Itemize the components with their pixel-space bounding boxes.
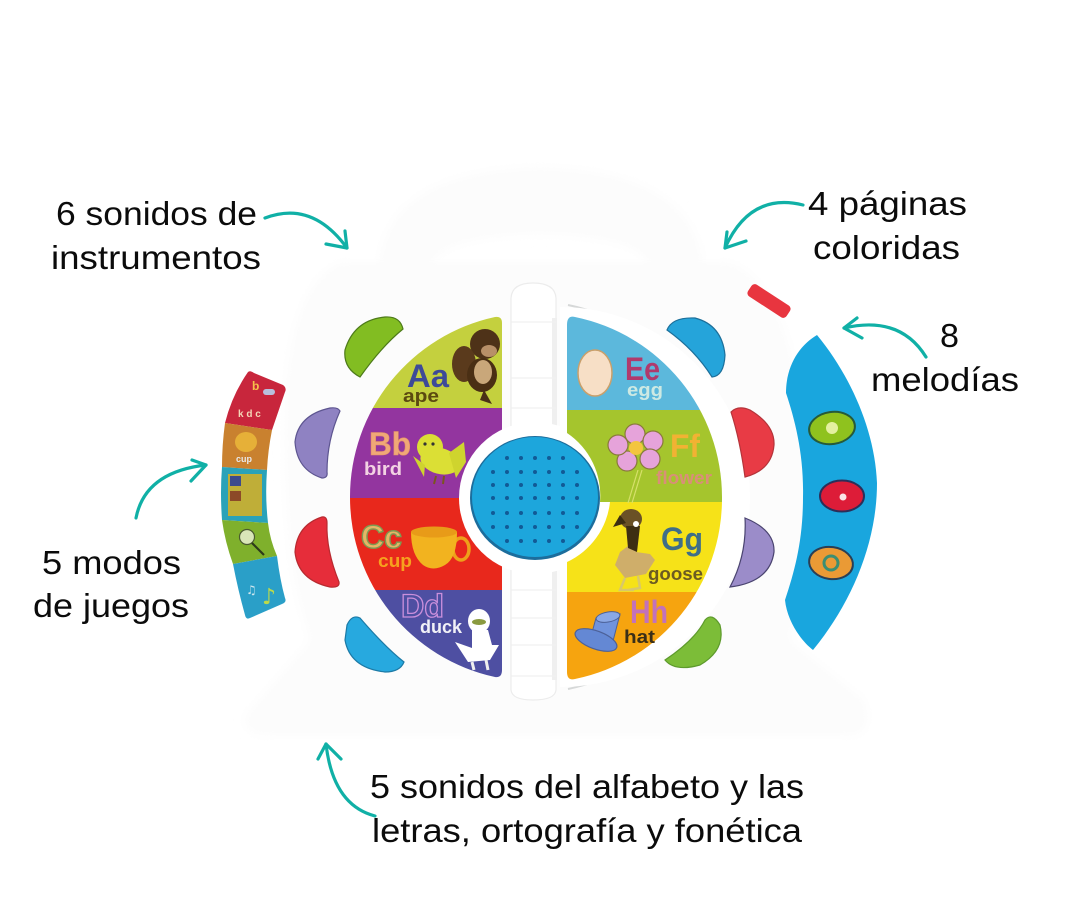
button: blue bottom left: [345, 617, 404, 672]
Dd duck: [401, 588, 499, 670]
label: 8 melodías: melodías: [871, 361, 1019, 398]
icon: goose: [613, 509, 655, 590]
Ff flower: Ff: [670, 428, 700, 464]
arrow: páginas: [725, 203, 803, 248]
Ee egg: [578, 350, 663, 400]
right alphabet page: [567, 316, 722, 680]
label: 8 melodías: [871, 317, 1019, 398]
arrow: alfabeto: [318, 744, 375, 816]
carry handle: [378, 167, 704, 268]
Cc cup: [361, 519, 412, 571]
segment: blue music: ♪: [262, 585, 276, 610]
button: red left: [295, 517, 339, 587]
Cc cup: cup: [378, 551, 412, 571]
button: orange: [807, 544, 855, 582]
segment: blue music: [233, 556, 286, 619]
game mode strip: [221, 371, 286, 619]
centre spine: [511, 283, 557, 700]
label: 8 melodías: 8: [940, 317, 959, 354]
icon: flower: [608, 424, 663, 503]
Hh hat: hat: [624, 627, 655, 647]
button: purple left: [295, 408, 340, 478]
segment: red letters: [225, 371, 286, 430]
Bb bird: Bb: [369, 426, 411, 462]
label: 6 sonidos de instrumentos: 6 sonidos de: [56, 195, 257, 232]
left alphabet page: [33, 185, 1019, 849]
white case: [244, 262, 868, 736]
icon: hat: [572, 610, 621, 656]
Bb bird: bird: [364, 459, 402, 479]
label: 5 modos de juegos: de juegos: [33, 587, 189, 624]
Dd duck: duck: [420, 617, 463, 637]
segment: orange cup: cup: [236, 454, 253, 464]
disc ring: [568, 305, 725, 689]
red top slider: [746, 283, 792, 319]
Aa ape: ape: [403, 386, 439, 406]
Ff flower: flower: [656, 468, 712, 488]
Dd duck: Dd: [401, 588, 444, 624]
Gg goose: Gg: [661, 521, 703, 557]
Gg goose: goose: [648, 564, 703, 584]
label: 5 modos de juegos: [33, 544, 189, 624]
Cc cup: Cc: [361, 519, 402, 555]
icon: ape: [452, 329, 500, 404]
Gg goose: [613, 509, 703, 590]
Aa ape: [403, 329, 500, 406]
blue melody panel: [785, 335, 877, 650]
label: alfabeto y fonética: 5 sonidos del alfabeto y las: [370, 768, 804, 805]
segment: red letters: b: [252, 379, 259, 393]
segment: teal pictures: [221, 467, 268, 523]
Bb bird: [364, 426, 466, 484]
segment: orange cup: [222, 423, 272, 470]
arrow: instrumentos: [265, 213, 347, 248]
Ee egg: Ee: [625, 351, 660, 387]
icon: cup: [411, 526, 469, 568]
instrument buttons: [295, 317, 774, 672]
label: 5 modos de juegos: 5 modos: [42, 544, 181, 581]
icon: egg: [578, 350, 612, 396]
icon: duck: [455, 609, 499, 670]
segment: red letters: k d c: [238, 409, 261, 420]
button: green top left: [345, 317, 403, 377]
label: 6 sonidos de instrumentos: instrumentos: [51, 239, 261, 276]
label: 4 páginas coloridas: [808, 185, 967, 266]
button: red: [820, 480, 864, 512]
Ee egg: egg: [627, 380, 663, 400]
button: red right: [731, 408, 774, 477]
button: green: [807, 409, 857, 447]
toy body: [244, 167, 868, 736]
Ff flower: [608, 424, 712, 503]
label: alfabeto y fonética: letras, ortografía y fonética: [372, 812, 803, 849]
Hh hat: [572, 594, 668, 656]
speaker: [459, 422, 611, 574]
icon: bird: [413, 434, 466, 484]
button: green bottom right: [665, 617, 721, 668]
segment: green magnifier: [222, 520, 277, 564]
Aa ape: Aa: [407, 358, 449, 394]
arrow: modos de juegos: [136, 460, 206, 518]
button: purple right: [730, 518, 774, 587]
segment: blue music: ♫: [246, 583, 257, 597]
infographic canvas: [34, 190, 1018, 849]
button: blue top right: [667, 318, 725, 377]
Hh hat: Hh: [630, 594, 668, 630]
label: 4 páginas coloridas: coloridas: [813, 229, 960, 266]
label: alfabeto y fonética: [370, 768, 804, 849]
label: 6 sonidos de instrumentos: [51, 195, 261, 276]
label: 4 páginas coloridas: 4 páginas: [808, 185, 967, 222]
arrow: melodías: [844, 318, 926, 357]
